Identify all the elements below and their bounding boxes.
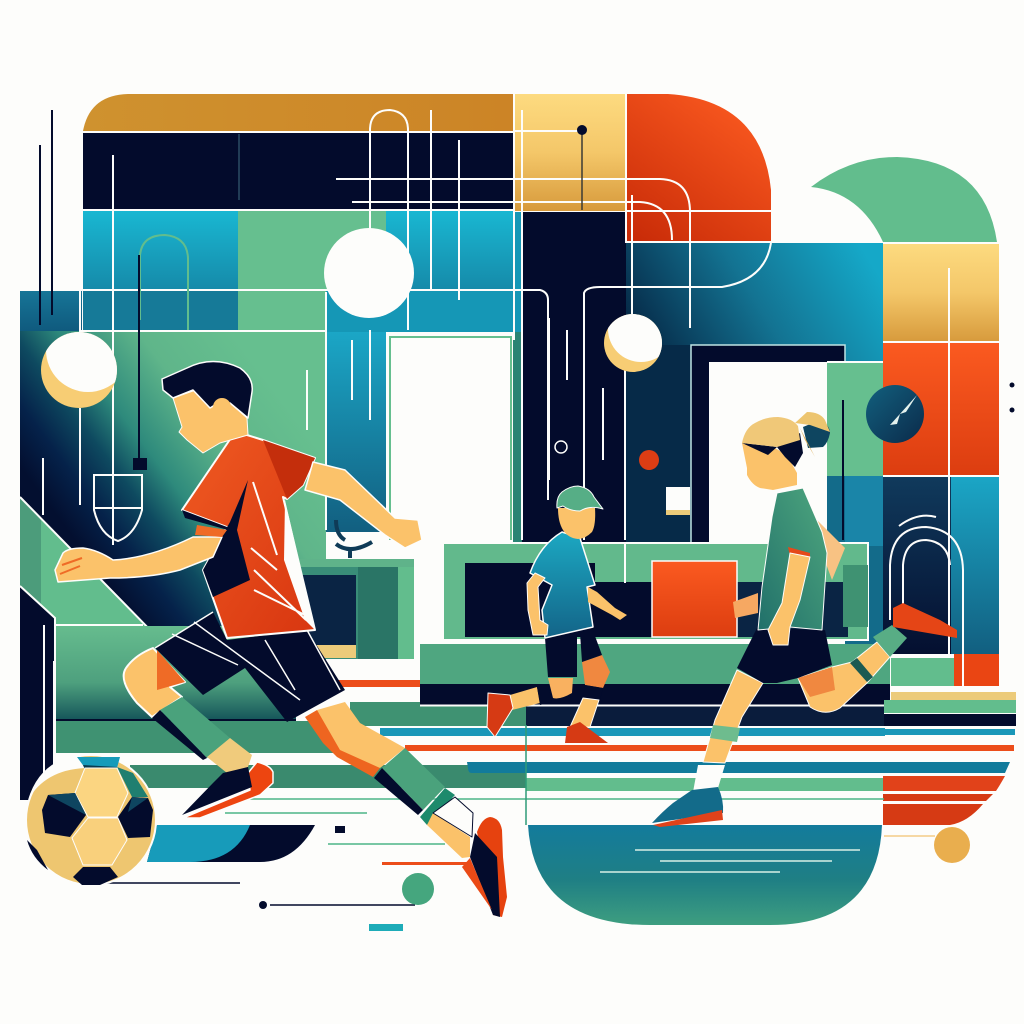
panel: green dome (811, 157, 997, 242)
back hand (733, 593, 758, 618)
front leg (305, 702, 473, 858)
front leg (565, 655, 610, 743)
panel: lower platform (420, 644, 1016, 726)
panel: teal bowl (528, 825, 882, 925)
shorts (545, 628, 602, 677)
icon: lamp centre (324, 228, 414, 318)
right arm (588, 587, 627, 620)
panel: bench (443, 543, 868, 640)
left arm (527, 573, 548, 635)
panel: door right (709, 362, 827, 544)
icon: lamp right (604, 314, 662, 372)
panel: upper architecture (83, 94, 771, 542)
icon: soccer ball (26, 755, 156, 885)
back leg (487, 678, 573, 737)
hair (742, 417, 803, 467)
shirt (530, 532, 595, 638)
cap (557, 486, 603, 511)
figure: small boy (487, 486, 627, 743)
front arm (768, 547, 810, 645)
shorts (737, 628, 832, 683)
hair (162, 362, 252, 418)
icon: arch right (890, 516, 963, 686)
figure: big boy (55, 362, 507, 917)
icon: wall details (555, 382, 1014, 515)
front shoe (462, 817, 507, 917)
skin wedge (817, 520, 845, 580)
arm left (55, 525, 227, 582)
head (742, 443, 797, 490)
icon: hanging shield (94, 458, 147, 541)
head (173, 385, 248, 453)
front leg (693, 670, 763, 792)
head (558, 508, 595, 539)
ear (213, 398, 231, 416)
arm right (305, 462, 422, 548)
panel: right blue wall (626, 243, 883, 546)
icon: wall ball (866, 385, 924, 443)
back shoe (182, 762, 273, 818)
figure: girl (652, 412, 957, 827)
floor stripes (130, 680, 1015, 825)
thin white linework (20, 94, 999, 655)
back leg (798, 603, 957, 712)
icon: lamp left (41, 332, 117, 408)
ponytail (795, 412, 830, 457)
shirt (758, 488, 827, 630)
panel: desk (292, 520, 414, 659)
shirt (182, 435, 315, 638)
shoe (652, 787, 723, 827)
panel: stairs left (20, 497, 350, 800)
shorts (155, 612, 345, 722)
icon: dark dot (577, 125, 587, 135)
panel: left green wall (20, 291, 386, 661)
illustration: children playing football (20, 94, 1016, 931)
panel: right colour column (845, 243, 999, 686)
panel: white door centre (386, 332, 522, 547)
panel: ground marks (100, 825, 970, 931)
back leg (124, 648, 252, 773)
